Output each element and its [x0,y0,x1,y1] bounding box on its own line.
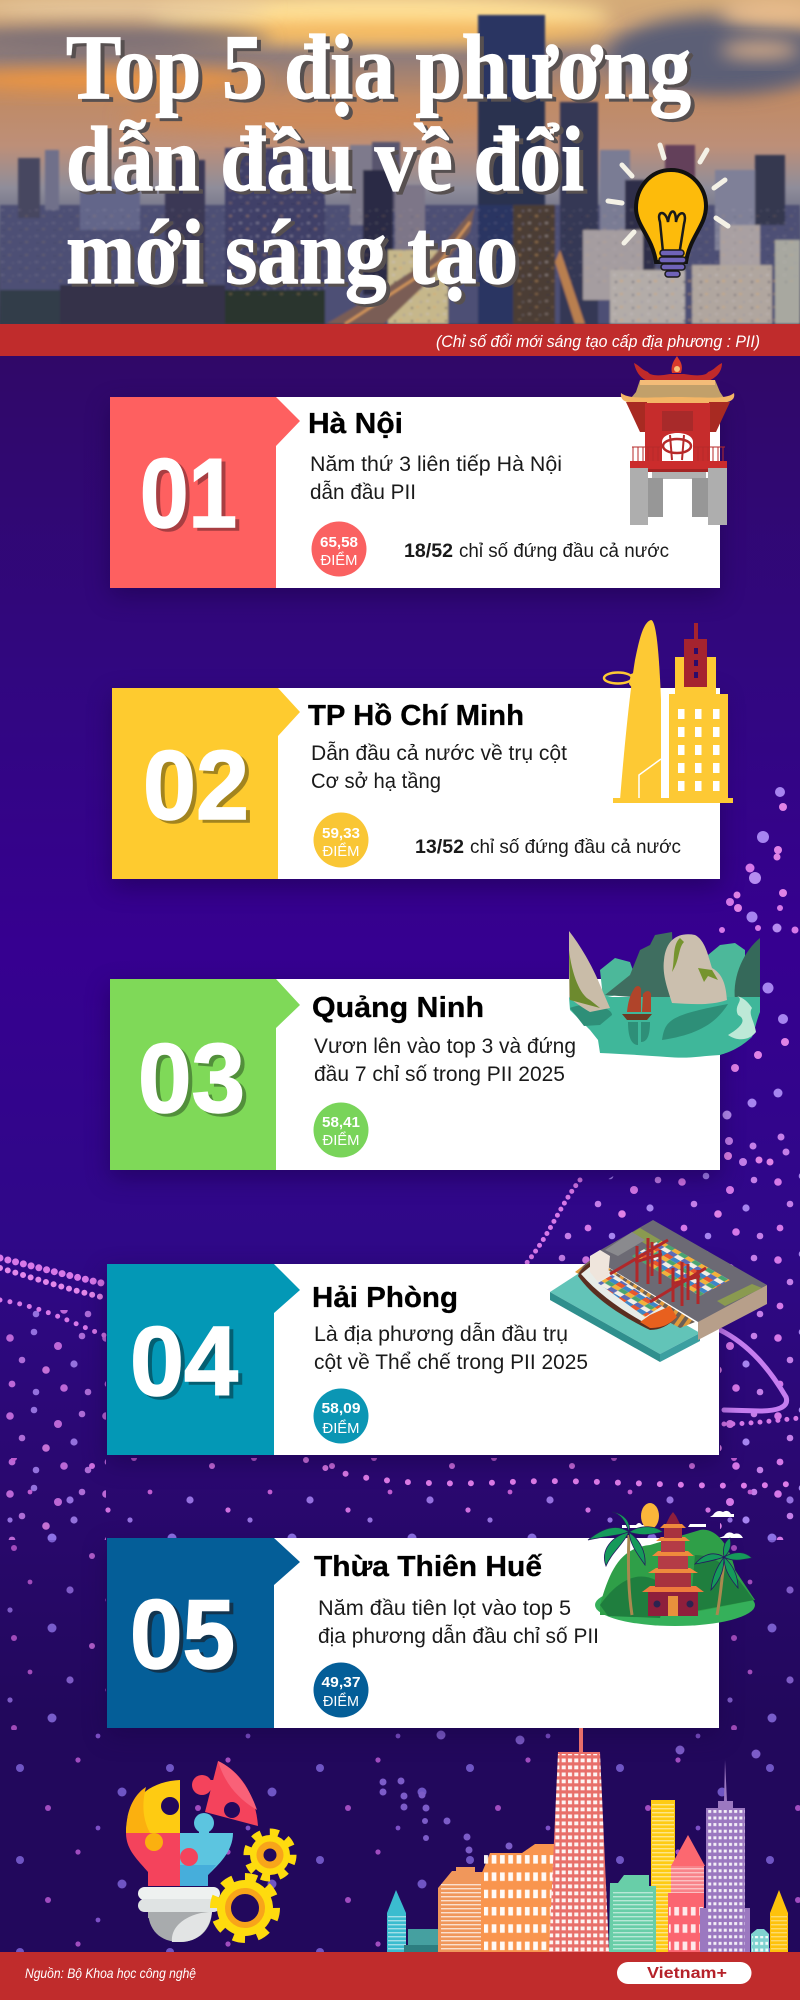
card 03: Quảng Ninh [110,979,720,1170]
icon: Hai Phong container port [550,1220,767,1362]
number tab [110,397,300,588]
score badge: ĐIỂM [322,1419,360,1437]
score badge: 58,41 [322,1115,360,1131]
card body [110,397,720,588]
illustration: colourful city skyline [387,1728,788,1952]
place name: Hải Phòng [312,1282,458,1314]
card body [107,1264,719,1455]
description [314,1035,576,1086]
number: 04 [130,1306,238,1416]
card body [107,1538,719,1728]
card body [112,688,720,879]
indicators note: chỉ số đứng đầu cả nước [470,837,681,858]
description: dẫn đầu PII [310,481,416,504]
indicators note: chỉ số đứng đầu cả nước [459,541,669,562]
number tab [107,1538,300,1728]
logo: Vietnam+ [617,1962,752,1984]
description: Năm thứ 3 liên tiếp Hà Nội [310,453,562,476]
place name: Hà Nội [308,408,403,440]
title: Top 5 địa phương [66,16,691,118]
description: đầu 7 chỉ số trong PII 2025 [314,1063,565,1086]
score badge [314,1388,368,1444]
score badge: 49,37 [322,1675,360,1691]
place name: Thừa Thiên Huế [314,1551,543,1583]
number tab [110,979,300,1170]
description: Vươn lên vào top 3 và đứng [314,1035,576,1058]
logo: Vietnam+: Vietnam+ [647,1965,727,1982]
icon: Khue Van Cac pavilion [621,356,734,525]
icon: light bulb [608,145,728,277]
score badge: 65,58 [320,535,358,551]
score badge [314,1102,368,1158]
score badge [312,522,366,576]
gears [214,1832,293,1939]
number: 03 [138,1023,245,1133]
footer band [0,1952,800,2000]
title: dẫn đầu về đổi [66,108,584,210]
score badge: 59,33 [322,826,360,842]
page background [0,356,800,1956]
description [318,1597,599,1648]
description [310,453,562,504]
number: 01 [140,438,237,548]
description: cột về Thể chế trong PII 2025 [314,1351,588,1374]
description: Năm đầu tiên lọt vào top 5 [318,1597,571,1620]
score badge [314,1662,368,1718]
description [314,1323,588,1374]
card 05: Thừa Thiên Huế [107,1538,719,1728]
title: mới sáng tạo [66,201,518,303]
indicators note: 18/52 [404,541,453,562]
red subtitle band [0,324,800,356]
card 01: Hà Nội [110,397,720,588]
score badge: ĐIỂM [322,842,360,860]
icon: Thien Mu pagoda on island [588,1503,755,1626]
description: Cơ sở hạ tầng [311,770,441,793]
card 02: TP Hồ Chí Minh [112,688,720,879]
subtitle: (Chỉ số đổi mới sáng tạo cấp địa phương : PII) [436,332,760,351]
icon: Ha Long Bay [569,931,760,1058]
description: địa phương dẫn đầu chỉ số PII [318,1625,599,1648]
number: 05 [130,1579,235,1689]
score badge [314,812,368,868]
header photo: city skyline at sunset [0,0,800,324]
title [66,16,691,303]
number tab [107,1264,300,1455]
score badge: ĐIỂM [320,551,358,569]
card body [110,979,720,1170]
indicators note: 13/52 [415,837,464,858]
number: 02 [143,730,249,840]
score badge: ĐIỂM [322,1131,360,1149]
card 04: Hải Phòng [107,1264,719,1455]
description: Là địa phương dẫn đầu trụ [314,1323,568,1346]
description [311,742,567,793]
place name: TP Hồ Chí Minh [308,700,524,732]
icon: Bitexco and Saigon towers [604,620,733,803]
score badge: ĐIỂM [323,1692,359,1710]
source note: Nguồn: Bộ Khoa học công nghệ [25,1966,196,1981]
description: Dẫn đầu cả nước về trụ cột [311,742,567,765]
number tab [112,688,300,879]
score badge: 58,09 [322,1401,360,1417]
place name: Quảng Ninh [312,992,484,1024]
background particle field [0,787,800,1952]
illustration: puzzle light bulb with gears [126,1761,293,1942]
